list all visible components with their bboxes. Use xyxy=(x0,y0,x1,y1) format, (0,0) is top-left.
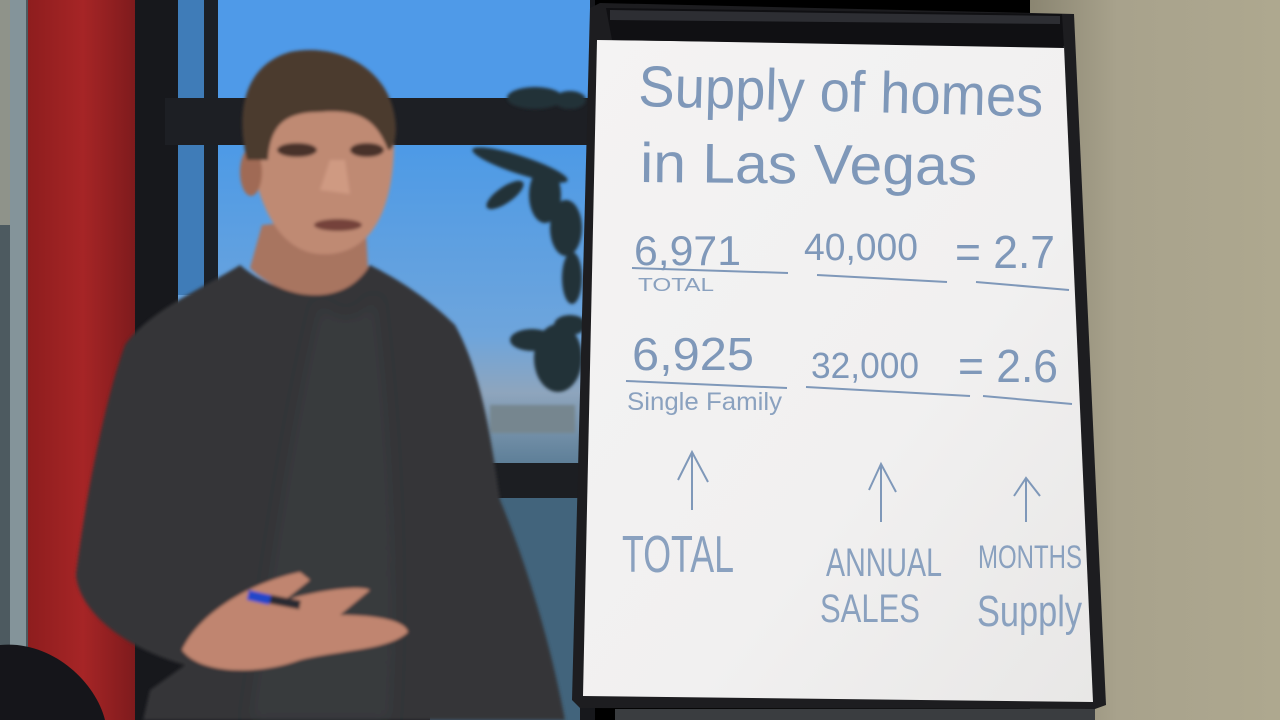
window outdoor foliage xyxy=(470,87,586,433)
row 2: single family: = 2.6 xyxy=(958,340,1058,392)
sweater shading xyxy=(250,300,393,720)
nose xyxy=(320,160,350,194)
arrow: annual sales xyxy=(869,464,896,522)
board title: Supply of homes xyxy=(638,54,1044,130)
board top clip xyxy=(606,8,1064,48)
ear xyxy=(240,148,262,196)
background wall xyxy=(1030,0,1280,720)
row 1: total: TOTAL xyxy=(638,275,714,295)
red curtain xyxy=(28,0,138,720)
row 2: single family xyxy=(626,328,1072,416)
board title: in Las Vegas xyxy=(640,131,977,197)
head xyxy=(248,72,394,254)
row 2: single family: Single Family xyxy=(627,388,783,416)
arrow: total xyxy=(678,452,708,510)
label: total: TOTAL xyxy=(622,526,734,584)
hand xyxy=(182,572,408,670)
chair foreground xyxy=(0,645,105,720)
whiteboard xyxy=(572,3,1106,720)
board title xyxy=(638,54,1044,197)
marker pen xyxy=(248,595,300,605)
label: months supply: MONTHS xyxy=(978,539,1082,575)
board frame xyxy=(572,3,1106,709)
label: annual sales: SALES xyxy=(820,587,920,631)
label: annual sales xyxy=(820,541,942,631)
row 2: single family: 32,000 xyxy=(811,345,919,386)
label: months supply: Supply xyxy=(977,587,1082,636)
row 2: single family: 6,925 xyxy=(632,328,754,380)
neck xyxy=(250,215,368,295)
label: annual sales: ANNUAL xyxy=(826,541,942,585)
sweater xyxy=(76,265,565,720)
window frame xyxy=(135,0,595,720)
board surface xyxy=(583,40,1093,702)
row 1: total xyxy=(632,226,1069,295)
presenter xyxy=(76,50,565,720)
eyes xyxy=(277,143,384,157)
left window strip xyxy=(0,0,30,720)
hair xyxy=(242,50,396,160)
row 1: total: = 2.7 xyxy=(955,226,1055,278)
row 1: total: 40,000 xyxy=(804,227,918,269)
mouth xyxy=(314,219,362,231)
row 1: total: 6,971 xyxy=(634,227,741,274)
arrow: months supply xyxy=(1014,478,1040,522)
label: months supply xyxy=(977,539,1082,636)
